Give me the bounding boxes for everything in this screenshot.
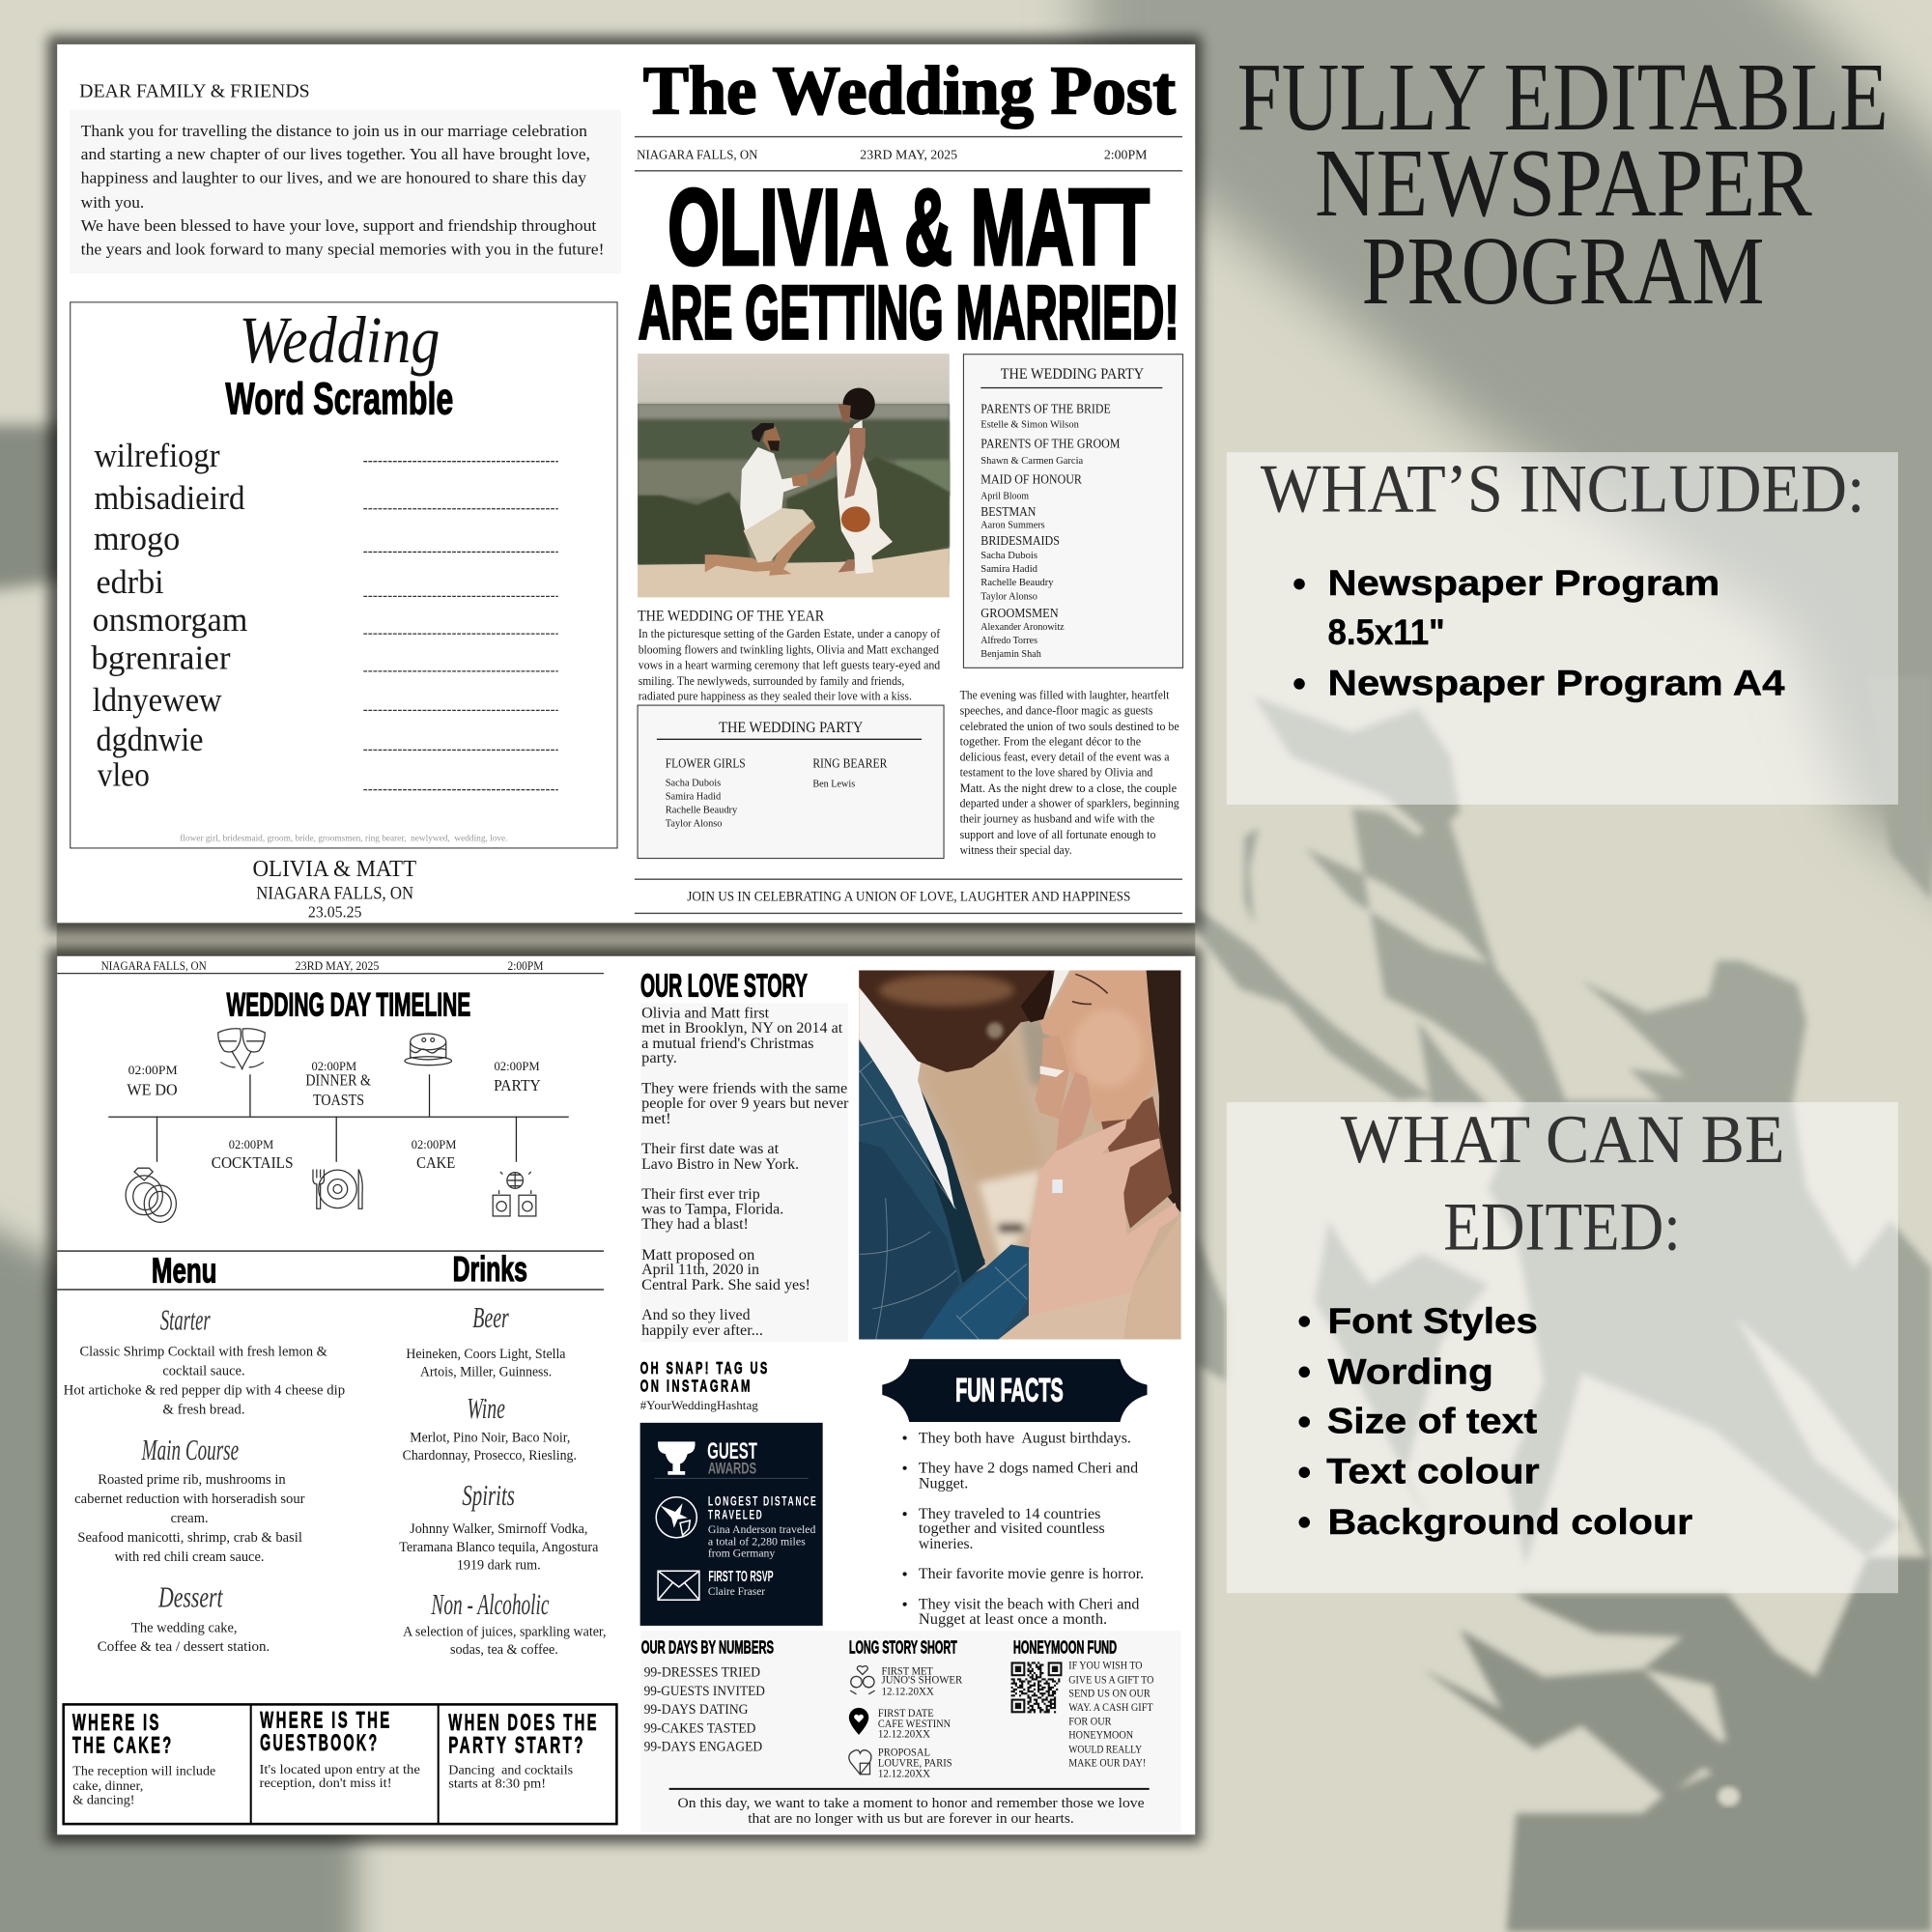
panel: our love story: And so they lived <box>641 1307 751 1323</box>
menu column: Hot artichoke & red pepper dip with 4 cheese dip <box>64 1382 345 1398</box>
panel: our love story: a mutual friend's Christmas <box>641 1036 813 1052</box>
honeymoon fund: WOULD REALLY <box>1068 1742 1142 1755</box>
menu column: & fresh bread. <box>162 1402 245 1417</box>
honeymoon fund: MAKE OUR DAY! <box>1068 1755 1146 1769</box>
panel: wedding word scramble: bgrenraier <box>91 640 231 677</box>
panel: our love story: met in Brooklyn, NY on 2014 at <box>641 1020 843 1037</box>
man kneeling <box>705 423 815 576</box>
panel: FAQ table: starts at 8:30 pm! <box>448 1776 546 1792</box>
woman's face and hair <box>1036 970 1180 1229</box>
menu column: cocktail sauce. <box>162 1363 245 1378</box>
panel: what can be edited: Size of text <box>1327 1401 1537 1440</box>
icon: cake <box>405 1034 451 1065</box>
panel: wedding party list: GROOMSMEN <box>980 606 1059 621</box>
panel: wedding word scramble: wilrefiogr <box>94 438 220 474</box>
long story short: PROPOSAL <box>878 1747 930 1759</box>
panel: wedding party list: BRIDESMAIDS <box>980 533 1060 549</box>
panel: flower girls and ring bearer: Rachelle Beaudry <box>666 805 738 816</box>
panel: fun facts <box>882 1359 1148 1628</box>
our days by numbers: 99-DRESSES TRIED <box>644 1665 760 1681</box>
panel: fun facts: They traveled to 14 countries <box>919 1506 1100 1522</box>
instagram call-out: ON INSTAGRAM <box>640 1377 753 1396</box>
article: the evening: support and love of all fortunate enough to <box>960 828 1155 841</box>
panel: guest awards: AWARDS <box>708 1460 756 1478</box>
panel: wedding party list: Alexander Aronowitz <box>980 621 1065 633</box>
article: the evening: The evening was filled with laughter, heartfelt <box>960 689 1170 702</box>
panel: FAQ table: cake, dinner, <box>72 1778 143 1794</box>
panel: flower girls and ring bearer: THE WEDDING PARTY <box>719 720 864 736</box>
panel: our love story: Lavo Bistro in New York. <box>641 1156 799 1173</box>
drinks column: Teramana Blanco tequila, Angostura <box>399 1540 599 1555</box>
photo: couple close-up <box>857 968 1183 1343</box>
panel: wedding party list: THE WEDDING PARTY <box>1001 366 1145 383</box>
greeting block <box>70 81 621 273</box>
QR code <box>1011 1662 1061 1712</box>
woman standing <box>806 387 893 574</box>
panel: FAQ table: THE CAKE? <box>72 1732 173 1758</box>
panel: wedding party list: Aaron Summers <box>980 519 1045 530</box>
long story short: 12.12.20XX <box>881 1686 935 1697</box>
article: the wedding of the year: radiated pure happiness as they sealed their love with a kiss. <box>639 690 912 703</box>
headline: ARE GETTING MARRIED! <box>639 270 1179 355</box>
honeymoon fund: HONEYMOON <box>1068 1728 1133 1742</box>
panel: wedding party list: MAID OF HONOUR <box>980 472 1082 488</box>
our days by numbers: 99-GUESTS INVITED <box>644 1684 765 1699</box>
panel: numbers, story, honeymoon <box>640 1631 1180 1833</box>
panel: wedding party list: PARENTS OF THE GROOM <box>980 437 1121 452</box>
drinks column: sodas, tea & coffee. <box>450 1642 558 1658</box>
panel: what's included: WHAT’S INCLUDED: <box>1261 450 1864 526</box>
timeline: PARTY <box>494 1076 541 1094</box>
panel: wedding word scramble: ldnyewew <box>93 682 222 719</box>
panel: FAQ table: It's located upon entry at the <box>259 1762 420 1777</box>
article: the evening: together. From the elegant décor to the <box>960 735 1142 749</box>
panel: wedding party list: Samira Hadid <box>980 563 1038 575</box>
panel: our love story: They had a blast! <box>641 1216 749 1233</box>
article: the evening: celebrated the union of two souls destined to be <box>960 720 1179 733</box>
panel: what's included: 8.5x11" <box>1327 612 1445 652</box>
article: the evening: Matt. As the night drew to a close, the couple <box>960 781 1178 795</box>
woman's hand and ring <box>998 1072 1180 1340</box>
article: the evening <box>960 689 1179 857</box>
drinks column: Heineken, Coors Light, Stella <box>406 1347 566 1362</box>
honeymoon fund: SEND US ON OUR <box>1068 1687 1151 1700</box>
timeline <box>108 987 569 1222</box>
panel: our love story: Their first date was at <box>641 1141 780 1157</box>
icon: envelope <box>658 1571 699 1600</box>
timeline: 02:00PM <box>494 1060 540 1073</box>
panel: FAQ table: WHERE IS <box>72 1710 161 1736</box>
panel: our love story: happily ever after... <box>641 1322 763 1339</box>
panel: wedding word scramble: mrogo <box>94 521 180 557</box>
honeymoon fund <box>1011 1637 1154 1769</box>
honeymoon fund: HONEYMOON FUND <box>1013 1637 1117 1658</box>
panel: our love story: They were friends with the same <box>641 1080 847 1096</box>
panel: wedding word scramble <box>71 302 617 848</box>
panel: flower girls and ring bearer: FLOWER GIRLS <box>666 756 746 772</box>
panel: what's included: Newspaper Program A4 <box>1327 663 1785 702</box>
panel: our love story <box>640 969 849 1342</box>
man's suit and shirt <box>859 988 1031 1340</box>
title: fully editable newspaper program: PROGRAM <box>1361 216 1765 325</box>
menu column <box>64 1303 345 1655</box>
panel: fun facts: They both have August birthdays. <box>919 1430 1131 1446</box>
greeting block: We have been blessed to have your love, support and friendship throughout <box>81 216 597 235</box>
menu column: cabernet reduction with horseradish sour <box>74 1492 305 1507</box>
long story short: FIRST DATE <box>878 1708 934 1719</box>
couple names and date: 23.05.25 <box>308 902 361 921</box>
drinks column <box>399 1301 607 1658</box>
panel: FAQ table: PARTY START? <box>448 1732 585 1758</box>
panel: guest awards <box>640 1423 823 1626</box>
panel: FAQ table: reception, don't miss it! <box>259 1776 392 1791</box>
panel: flower girls and ring bearer: Taylor Alonso <box>666 818 722 830</box>
panel: wedding party list: Estelle & Simon Wilson <box>980 419 1079 431</box>
panel: flower girls and ring bearer: RING BEARER <box>812 756 888 772</box>
panel: what can be edited: Wording <box>1327 1351 1493 1391</box>
menu column: The wedding cake, <box>131 1620 238 1635</box>
long story short: 12.12.20XX <box>878 1728 931 1740</box>
panel: our love story: April 11th, 2020 in <box>641 1262 759 1278</box>
panel: our love story: Matt proposed on <box>641 1247 754 1264</box>
honeymoon fund: IF YOU WISH TO <box>1068 1658 1143 1671</box>
panel: wedding word scramble: Word Scramble <box>225 374 453 424</box>
panel: what can be edited: EDITED: <box>1443 1188 1681 1264</box>
our days by numbers: 99-CAKES TASTED <box>644 1721 755 1737</box>
panel: wedding party list: BESTMAN <box>980 504 1036 520</box>
our days by numbers: 99-DAYS ENGAGED <box>644 1739 762 1754</box>
panel: our love story: met! <box>641 1111 671 1127</box>
couple names and date: NIAGARA FALLS, ON <box>256 884 413 904</box>
masthead: The Wedding Post: 23RD MAY, 2025 <box>860 148 957 163</box>
panel: our love story: Olivia and Matt first <box>641 1005 770 1021</box>
icon: plate and cutlery <box>313 1169 362 1208</box>
menu column: Roasted prime rib, mushrooms in <box>98 1472 286 1488</box>
timeline: WEDDING DAY TIMELINE <box>226 987 470 1024</box>
panel: flower girls and ring bearer <box>638 705 944 859</box>
menu column: Main Course <box>141 1434 239 1466</box>
photo: proposal on the dunes <box>638 354 951 597</box>
menu heading bar: Menu <box>152 1251 216 1290</box>
greeting block: and starting a new chapter of our lives together. You all have brought love, <box>81 145 590 163</box>
date strip: NIAGARA FALLS, ON <box>101 959 207 973</box>
panel: what can be edited: Text colour <box>1326 1452 1540 1492</box>
panel: FAQ table: & dancing! <box>72 1793 135 1808</box>
drinks column: 1919 dark rum. <box>457 1558 541 1574</box>
panel: what's included: Newspaper Program <box>1327 563 1719 603</box>
long story short: LONG STORY SHORT <box>849 1637 957 1658</box>
man's face <box>859 970 1056 1072</box>
panel: our love story: people for over 9 years but never <box>641 1095 849 1112</box>
icon: globe and plane <box>656 1497 696 1538</box>
panel: fun facts: They have 2 dogs named Cheri and <box>919 1460 1138 1476</box>
greeting block: Thank you for travelling the distance to join us in our marriage celebration <box>81 122 587 140</box>
menu column: Dessert <box>157 1581 224 1614</box>
greeting block: happiness and laughter to our lives, and we are honoured to share this day <box>81 169 587 187</box>
panel: guest awards: a total of 2,280 miles <box>708 1536 806 1548</box>
menu column: Classic Shrimp Cocktail with fresh lemon & <box>80 1345 327 1360</box>
drinks column: Wine <box>467 1392 505 1425</box>
our days by numbers: 99-DAYS DATING <box>644 1702 749 1718</box>
article: the evening: delicious feast, every detail of the event was a <box>960 751 1170 764</box>
greeting block: DEAR FAMILY & FRIENDS <box>79 81 310 102</box>
panel: wedding party list: Rachelle Beaudry <box>980 577 1054 588</box>
article: the evening: speeches, and dance-floor magic as guests <box>960 703 1152 717</box>
masthead: The Wedding Post: NIAGARA FALLS, ON <box>637 148 757 163</box>
panel: our love story: was to Tampa, Florida. <box>641 1201 783 1217</box>
panel: top newspaper page <box>57 44 1195 923</box>
article: the evening: testament to the love shared by Olivia and <box>960 765 1153 779</box>
panel: wedding word scramble: flower girl, bridesmaid, groom, bride, groomsmen, ring bearer, newlywed, wedding, love. <box>180 833 508 843</box>
panel: what can be edited <box>1227 1101 1898 1593</box>
long story short: LOUVRE, PARIS <box>878 1757 952 1769</box>
panel: bottom newspaper page <box>57 956 1195 1834</box>
memorial note: that are no longer with us but are forever in our hearts. <box>748 1811 1074 1827</box>
icon: hearts and lock <box>849 1750 871 1775</box>
panel: fun facts: Nugget. <box>919 1475 968 1492</box>
panel: wedding word scramble: mbisadieird <box>94 480 245 517</box>
honeymoon fund: WAY. A CASH GIFT <box>1068 1700 1153 1714</box>
panel: FAQ table <box>64 1704 616 1824</box>
article: the wedding of the year: vows in a heart warming ceremony that left guests teary-eyed and <box>639 659 941 672</box>
headline <box>639 168 1179 355</box>
menu heading bar <box>57 1250 604 1290</box>
panel: what's included <box>1227 450 1898 805</box>
greeting block: the years and look forward to many special memories with you in the future! <box>81 241 605 259</box>
panel: wedding word scramble: edrbi <box>96 564 164 601</box>
article: the evening: departed under a shower of sparklers, beginning <box>960 797 1179 810</box>
our days by numbers <box>641 1637 774 1754</box>
long story short: JUNO'S SHOWER <box>881 1675 963 1687</box>
article: the wedding of the year: smiling. The newlyweds, surrounded by family and friends, <box>639 674 904 688</box>
icon: wine glasses <box>218 1029 265 1069</box>
panel: guest awards: TRAVELED <box>708 1508 763 1522</box>
drinks column: Spirits <box>462 1479 515 1512</box>
panel: wedding party list: Alfredo Torres <box>980 635 1037 646</box>
date strip <box>57 959 604 974</box>
panel: wedding party list <box>963 355 1182 668</box>
panel: our love story: OUR LOVE STORY <box>640 969 808 1005</box>
menu column: with red chili cream sauce. <box>115 1549 264 1565</box>
footer banner: JOIN US IN CELEBRATING A UNION OF LOVE, LAUGHTER AND HAPPINESS <box>687 889 1130 904</box>
article: the wedding of the year: THE WEDDING OF THE YEAR <box>638 609 825 625</box>
panel: flower girls and ring bearer: Ben Lewis <box>812 779 855 790</box>
timeline: WE DO <box>127 1081 178 1099</box>
panel: fun facts: together and visited countless <box>919 1520 1105 1537</box>
menu column: Starter <box>160 1303 211 1336</box>
timeline: 02:00PM <box>412 1138 456 1151</box>
panel: our love story: party. <box>641 1050 677 1066</box>
couple names and date: OLIVIA & MATT <box>252 856 416 882</box>
panel: flower girls and ring bearer: Samira Hadid <box>666 790 722 802</box>
panel: guest awards: FIRST TO RSVP <box>708 1569 774 1585</box>
drinks column: Beer <box>472 1301 509 1334</box>
panel: wedding party list: April Bloom <box>980 491 1030 502</box>
drinks column: Artois, Miller, Guinness. <box>420 1365 552 1380</box>
masthead: The Wedding Post: The Wedding Post <box>643 52 1176 128</box>
panel: FAQ table: WHEN DOES THE <box>448 1710 599 1736</box>
timeline: 02:00PM <box>128 1064 178 1077</box>
article: the evening: their journey as husband and wife with the <box>960 812 1155 826</box>
panel: what can be edited: Background colour <box>1327 1502 1692 1542</box>
article: the wedding of the year: In the picturesque setting of the Garden Estate, under a canopy of <box>639 627 941 640</box>
instagram call-out <box>640 1358 770 1412</box>
masthead: The Wedding Post <box>635 52 1182 171</box>
panel: wedding word scramble: Wedding <box>239 303 440 377</box>
title: fully editable newspaper program <box>1237 43 1889 325</box>
panel: what can be edited: WHAT CAN BE <box>1341 1101 1785 1178</box>
long story short: 12.12.20XX <box>878 1768 931 1779</box>
honeymoon fund: FOR OUR <box>1068 1715 1112 1728</box>
long story short <box>849 1637 963 1779</box>
greeting block: with you. <box>81 193 144 212</box>
timeline: DINNER & <box>305 1071 371 1090</box>
article: the evening: witness their special day. <box>960 843 1072 857</box>
our days by numbers: OUR DAYS BY NUMBERS <box>641 1637 774 1658</box>
panel: wedding party list: PARENTS OF THE BRIDE <box>980 401 1111 416</box>
panel: our love story: Their first ever trip <box>641 1186 760 1203</box>
panel: FAQ table: GUESTBOOK? <box>260 1730 379 1756</box>
panel: FAQ table: The reception will include <box>72 1764 215 1779</box>
panel: FAQ table: Dancing and cocktails <box>448 1763 573 1778</box>
menu heading bar: Drinks <box>453 1250 527 1289</box>
masthead: The Wedding Post: 2:00PM <box>1104 148 1148 163</box>
title: fully editable newspaper program: NEWSPAPER <box>1315 128 1812 237</box>
drinks column: Johnny Walker, Smirnoff Vodka, <box>410 1521 587 1537</box>
timeline: 02:00PM <box>229 1138 273 1151</box>
panel: our love story: Central Park. She said yes! <box>641 1277 810 1293</box>
panel: wedding party list: Shawn & Carmen Garcia <box>980 455 1083 467</box>
panel: guest awards: LONGEST DISTANCE <box>708 1494 817 1509</box>
panel: FAQ table: WHERE IS THE <box>260 1708 392 1734</box>
drinks column: A selection of juices, sparkling water, <box>403 1624 607 1639</box>
long story short: FIRST MET <box>881 1665 933 1677</box>
memorial note: On this day, we want to take a moment to honor and remember those we love <box>678 1796 1145 1811</box>
timeline: TOASTS <box>313 1091 364 1109</box>
article: the wedding of the year <box>638 609 941 703</box>
icon: couple <box>850 1666 875 1694</box>
honeymoon fund: GIVE US A GIFT TO <box>1068 1673 1154 1687</box>
menu column: Seafood manicotti, shrimp, crab & basil <box>77 1530 302 1546</box>
timeline: CAKE <box>416 1153 455 1172</box>
panel: flower girls and ring bearer: Sacha Dubois <box>666 777 721 788</box>
panel: wedding word scramble: dgdnwie <box>96 722 203 758</box>
panel: fun facts: Their favorite movie genre is horror. <box>919 1566 1144 1582</box>
panel: guest awards: from Germany <box>708 1548 776 1559</box>
panel: fun facts: FUN FACTS <box>955 1373 1064 1409</box>
drinks column: Chardonnay, Prosecco, Riesling. <box>403 1448 577 1463</box>
instagram call-out: #YourWeddingHashtag <box>640 1399 758 1412</box>
headline: OLIVIA & MATT <box>668 168 1150 288</box>
long story short: CAFE WESTINN <box>878 1719 952 1730</box>
icon: disco ball and speakers <box>493 1172 536 1216</box>
timeline: 02:00PM <box>311 1060 356 1073</box>
icon: map pin heart <box>849 1708 868 1735</box>
drinks column: Merlot, Pino Noir, Baco Noir, <box>410 1430 570 1445</box>
panel: guest awards: Gina Anderson traveled <box>708 1524 816 1536</box>
icon: wedding rings <box>126 1168 176 1222</box>
panel: guest awards: GUEST <box>707 1438 757 1464</box>
panel: wedding party list: Taylor Alonso <box>980 590 1037 602</box>
panel: fun facts: They visit the beach with Cheri and <box>919 1596 1140 1612</box>
drinks column: Non - Alcoholic <box>431 1588 550 1621</box>
date strip: 2:00PM <box>508 959 544 973</box>
panel: fun facts: wineries. <box>919 1536 973 1552</box>
icon: trophy <box>658 1441 696 1475</box>
timeline: COCKTAILS <box>212 1153 294 1172</box>
panel: wedding party list: Sacha Dubois <box>980 550 1037 561</box>
memorial note <box>669 1789 1150 1827</box>
panel: what can be edited: Font Styles <box>1327 1301 1538 1341</box>
panel: fun facts: Nugget at least once a month. <box>919 1611 1107 1628</box>
instagram call-out: OH SNAP! TAG US <box>640 1358 770 1378</box>
date strip: 23RD MAY, 2025 <box>296 959 379 973</box>
menu column: Coffee & tea / dessert station. <box>98 1639 270 1655</box>
panel: guest awards: Claire Fraser <box>708 1586 765 1598</box>
article: the wedding of the year: blooming flowers and twinkling lights, Olivia and Matt exchanged <box>639 643 940 657</box>
panel: wedding word scramble: vleo <box>98 756 150 793</box>
panel: wedding word scramble: onsmorgam <box>93 602 248 639</box>
menu column: cream. <box>171 1511 209 1526</box>
panel: wedding party list: Benjamin Shah <box>980 648 1041 660</box>
couple names and date <box>252 856 416 921</box>
